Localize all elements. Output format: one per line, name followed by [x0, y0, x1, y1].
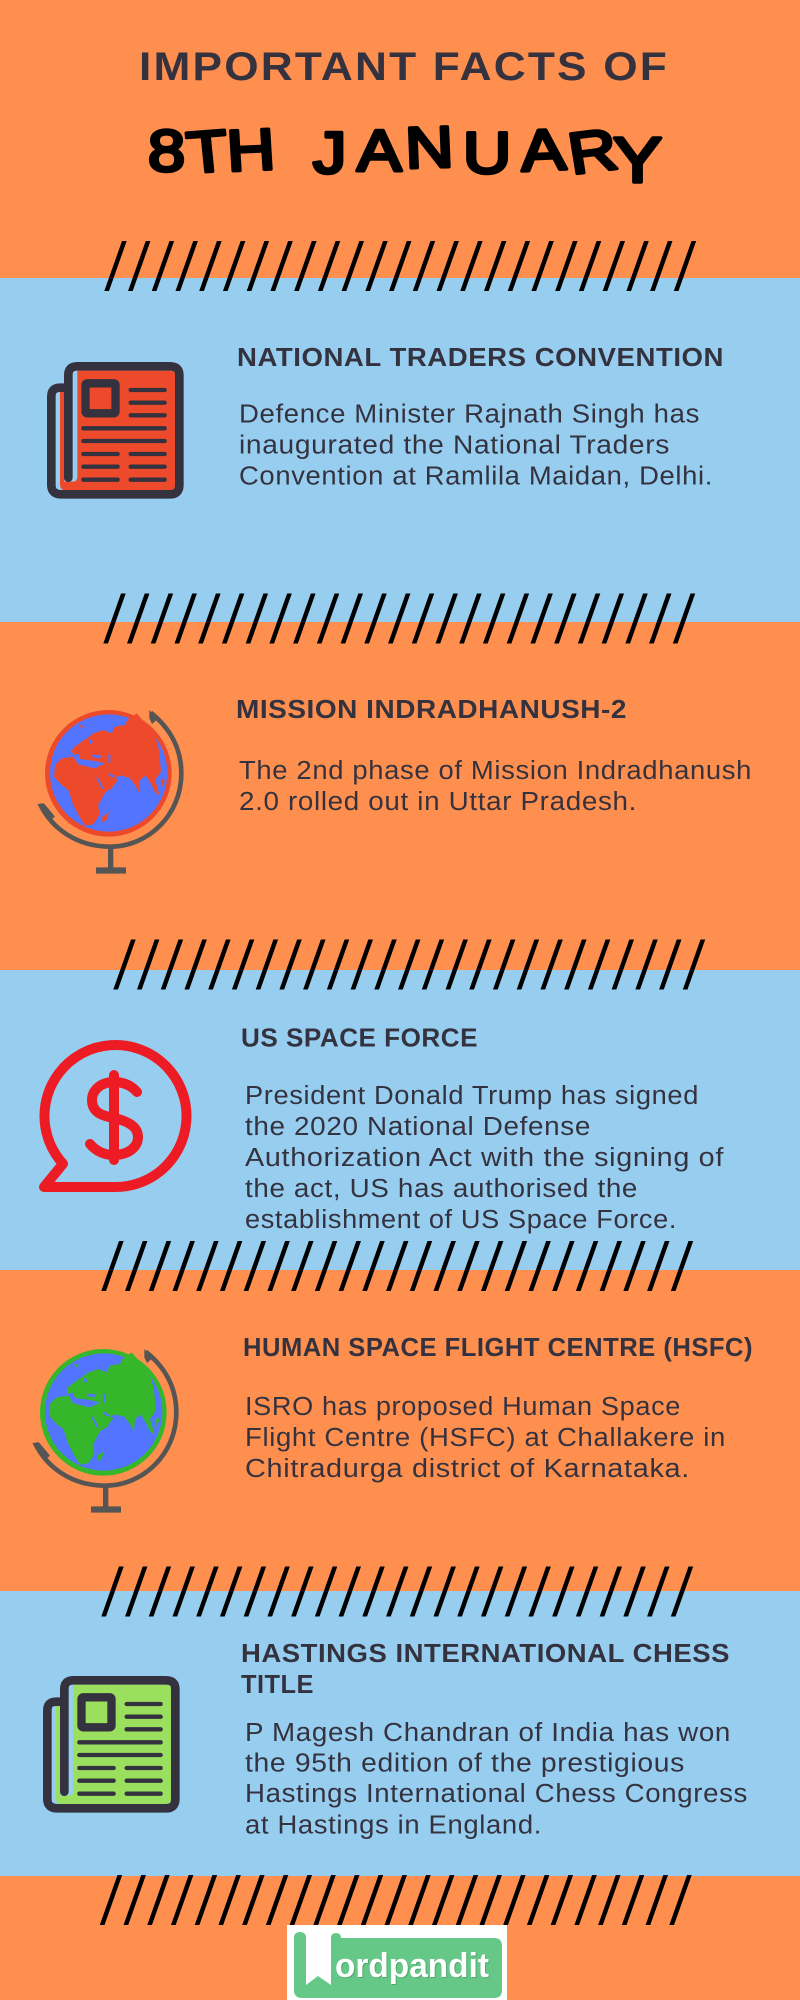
text block: hastings international chess title: P Magesh Chandran of India has won: [245, 1719, 731, 1747]
icon: dollar speech bubble: [44, 1045, 186, 1187]
heading: hastings international chess title: HASTINGS INTERNATIONAL CHESS: [241, 1638, 730, 1668]
panel: hastings international chess title: [0, 1591, 800, 1876]
text block: us space force: the act, US has authorised the: [245, 1175, 638, 1203]
icon: green newspaper: [47, 1680, 175, 1808]
text block: mission indradhanush-2: [239, 757, 752, 816]
text block: national traders convention: Defence Minister Rajnath Singh has: [239, 400, 700, 428]
icon: green globe: [32, 1349, 176, 1509]
text block: us space force: Authorization Act with the signing of: [245, 1144, 724, 1172]
heading: hastings international chess title: [241, 1638, 730, 1699]
panel: header: [0, 0, 800, 278]
heading: hastings international chess title: TITLE: [241, 1669, 314, 1699]
icon: red newspaper: [51, 366, 179, 494]
title: important facts of: IMPORTANT FACTS OF: [139, 45, 669, 89]
logo: wordpandit: ordpandit: [335, 1947, 489, 1985]
panel: human space flight centre: [0, 1270, 800, 1591]
text block: human space flight centre: [245, 1393, 726, 1483]
panel: us space force: [0, 970, 800, 1270]
text block: hastings international chess title: Hastings International Chess Congress: [245, 1780, 748, 1808]
text block: national traders convention: inaugurated the National Traders: [239, 432, 670, 460]
text block: mission indradhanush-2: 2.0 rolled out in Uttar Pradesh.: [239, 788, 637, 816]
heading: human space flight centre: HUMAN SPACE FLIGHT CENTRE (HSFC): [243, 1332, 753, 1362]
panel: national traders convention: [0, 278, 800, 622]
text block: national traders convention: Convention at Ramlila Maidan, Delhi.: [239, 462, 713, 490]
heading: us space force: US SPACE FORCE: [241, 1022, 478, 1052]
text block: national traders convention: [239, 400, 713, 490]
text block: hastings international chess title: at Hastings in England.: [245, 1812, 542, 1840]
heading: mission indradhanush-2: MISSION INDRADHANUSH-2: [236, 694, 627, 724]
panel: mission indradhanush-2: [0, 622, 800, 970]
title: 8th January: 8TH JANUARY: [148, 115, 662, 196]
text block: us space force: establishment of US Space Force.: [245, 1206, 677, 1234]
logo: wordpandit: [287, 1925, 507, 2000]
heading: national traders convention: NATIONAL TRADERS CONVENTION: [237, 342, 724, 372]
text block: us space force: [245, 1082, 724, 1234]
text block: human space flight centre: Flight Centre (HSFC) at Challakere in: [245, 1424, 726, 1452]
text block: us space force: the 2020 National Defense: [245, 1113, 591, 1141]
text block: mission indradhanush-2: The 2nd phase of Mission Indradhanush: [239, 757, 752, 785]
text block: human space flight centre: ISRO has proposed Human Space: [245, 1393, 681, 1421]
text block: hastings international chess title: [245, 1719, 748, 1840]
text block: us space force: President Donald Trump has signed: [245, 1082, 699, 1110]
panel: footer: [0, 1876, 800, 2000]
text block: hastings international chess title: the 95th edition of the prestigious: [245, 1750, 685, 1778]
icon: red globe: [37, 710, 181, 870]
text block: human space flight centre: Chitradurga district of Karnataka.: [245, 1455, 690, 1483]
